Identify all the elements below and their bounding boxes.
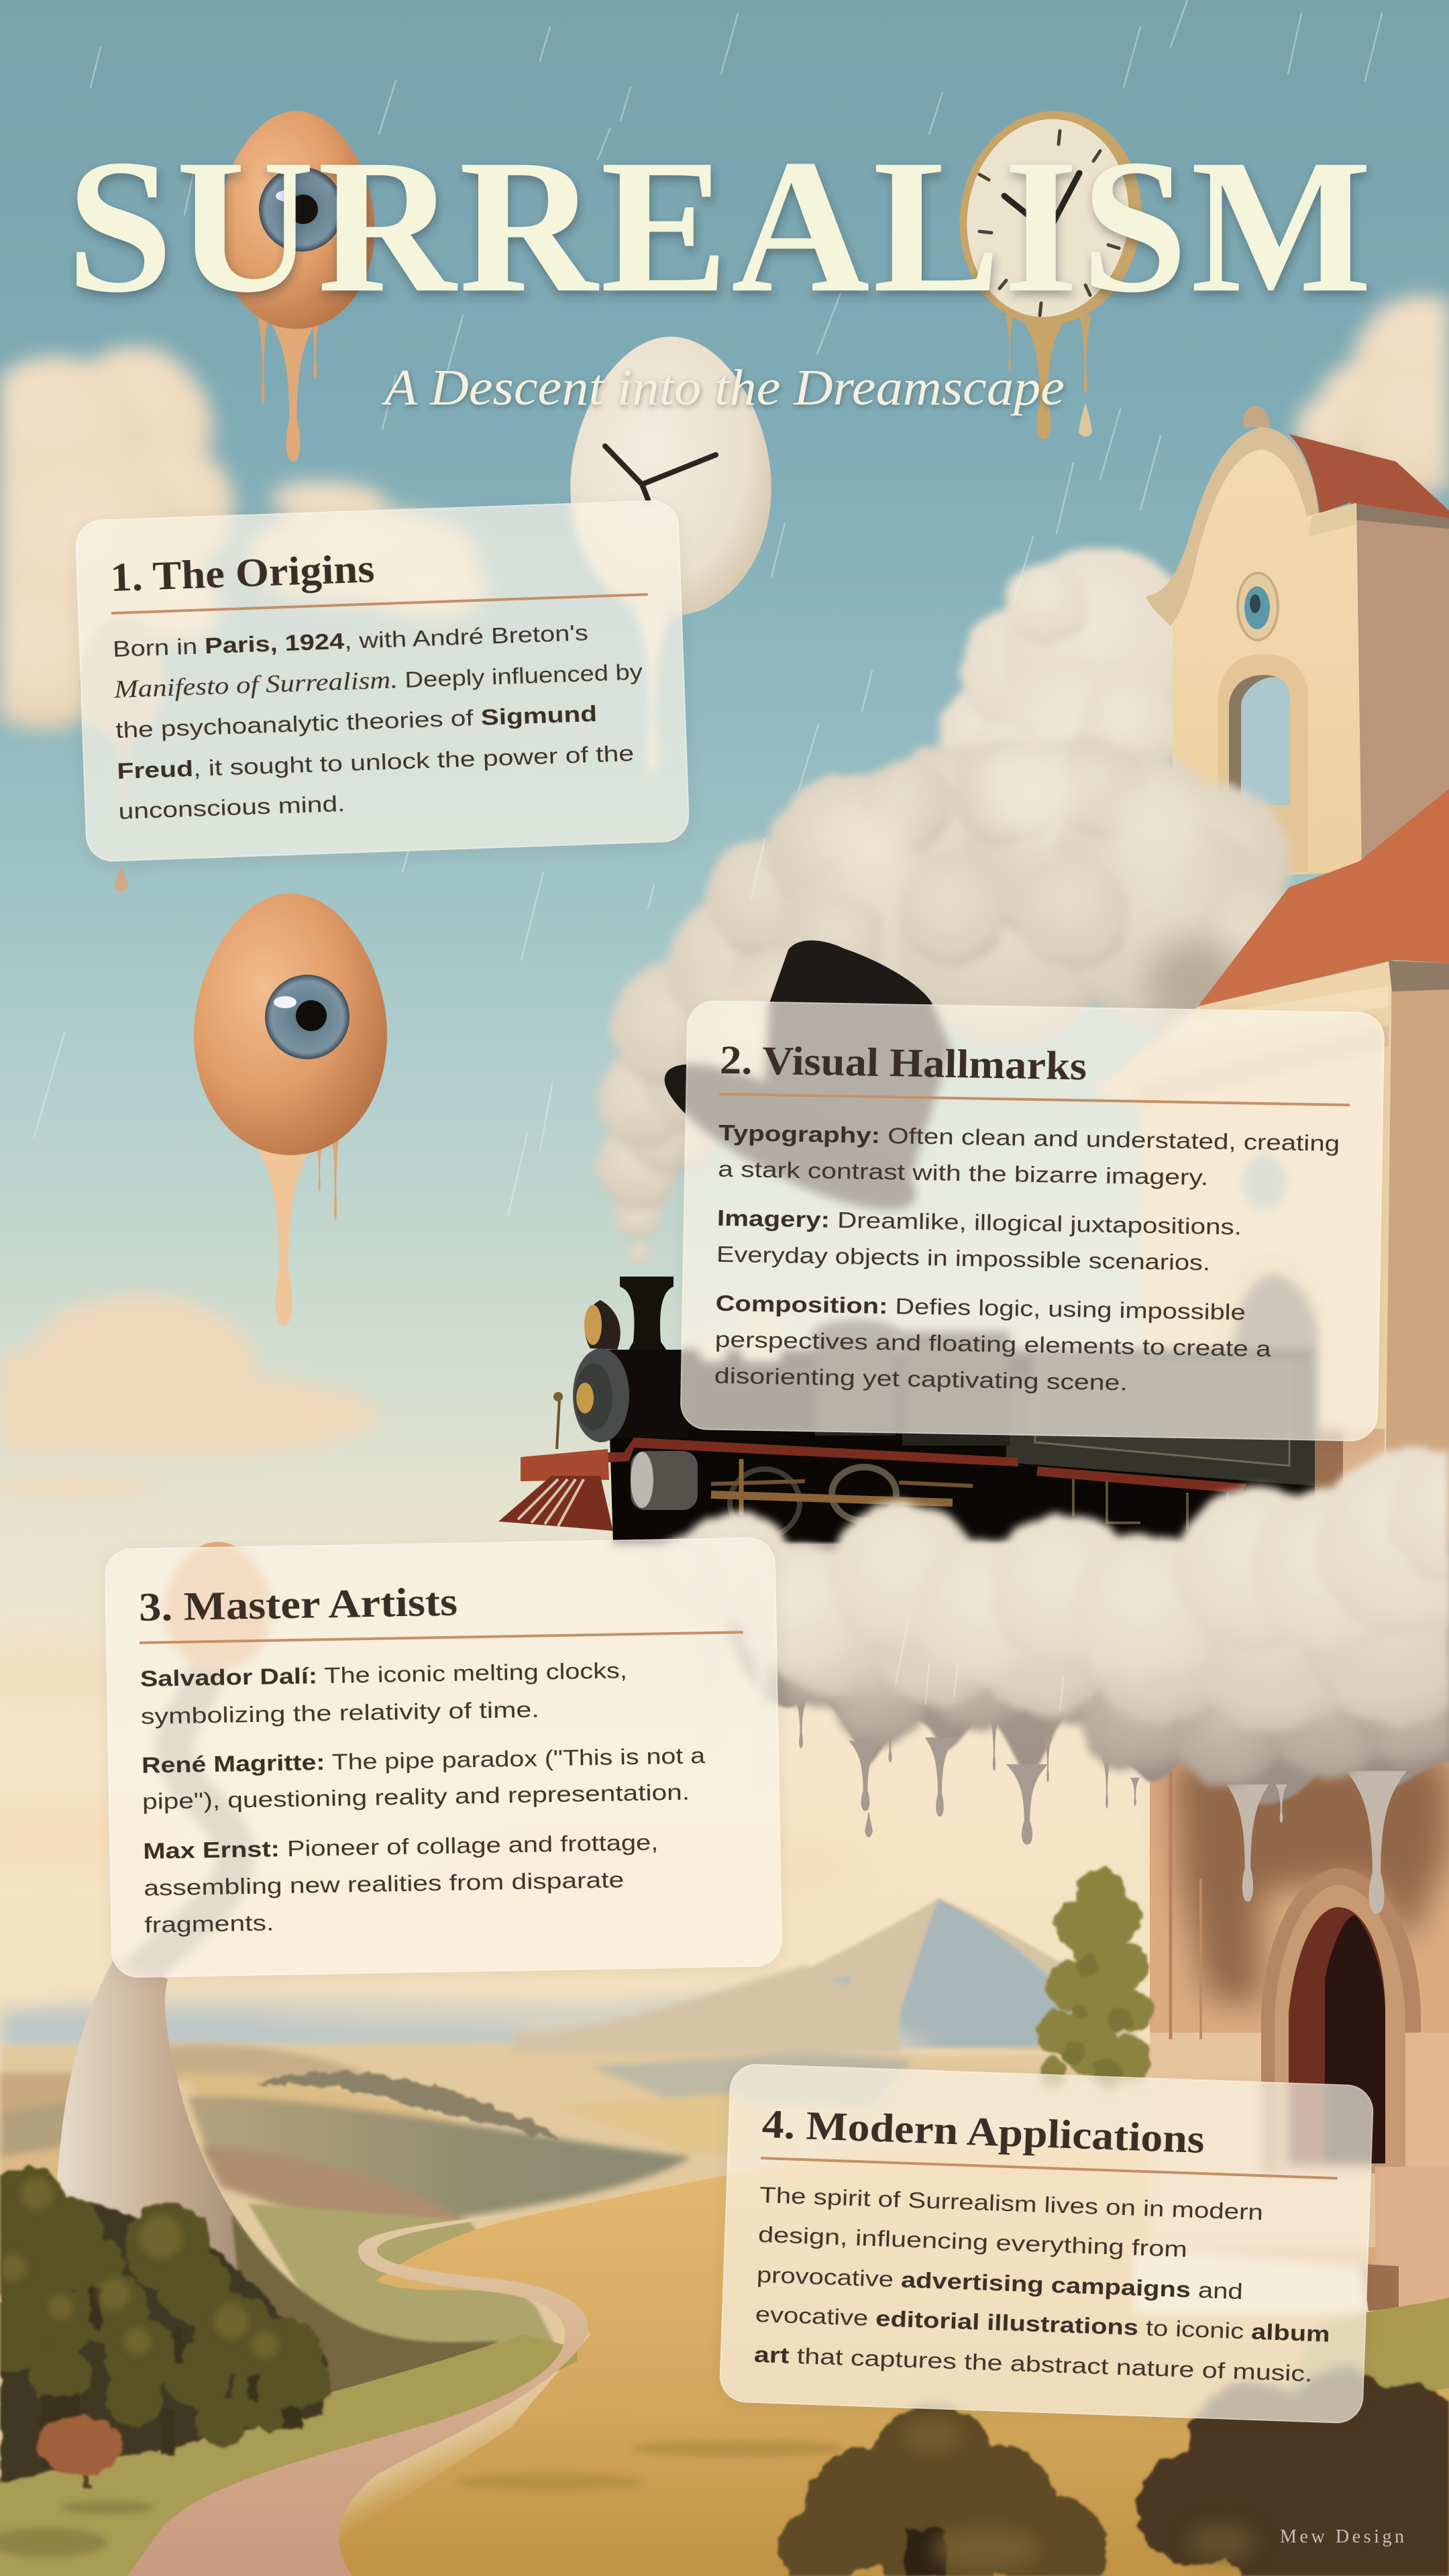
- imagery text: Imagery: Dreamlike, illogical juxtapositions.: [717, 1205, 1242, 1239]
- central cloud back lobe: [939, 547, 1221, 818]
- magritte text: [142, 1743, 706, 1814]
- panel: master artists: [104, 1537, 783, 1978]
- ernst text: fragments.: [144, 1910, 274, 1937]
- main title: SURREALISM: [66, 119, 1372, 332]
- cloud drips: [794, 1697, 1140, 1845]
- lower cloud dark puffs: [778, 1617, 1449, 1788]
- dali text: symbolizing the relativity of time.: [141, 1697, 539, 1729]
- upper right cloud: [1295, 295, 1449, 496]
- heading: the origins: 1. The Origins: [109, 546, 375, 600]
- applications body text: evocative editorial illustrations to iconic album: [755, 2302, 1330, 2347]
- typography text: Typography: Often clean and understated, creating: [718, 1120, 1340, 1156]
- grass at building foot: [1275, 2298, 1449, 2415]
- dali text: Salvador Dalí: The iconic melting clocks,: [140, 1658, 627, 1691]
- rain streaks: [34, 0, 1382, 1711]
- main eyeball egg: [194, 894, 387, 1326]
- heading: visual hallmarks: 2. Visual Hallmarks: [720, 1038, 1087, 1088]
- composition text: perspectives and floating elements to create a: [715, 1327, 1272, 1361]
- tower finial: [1243, 406, 1270, 427]
- heading: modern applications: 4. Modern Applications: [761, 2102, 1205, 2161]
- ernst text: assembling new realities from disparate: [144, 1867, 625, 1900]
- tower arch opening: [1218, 654, 1308, 872]
- origins body text: the psychoanalytic theories of Sigmund: [115, 701, 598, 743]
- round window: [1238, 573, 1278, 640]
- mid left cloud: [0, 1295, 382, 1497]
- magritte text: René Magritte: The pipe paradox ("This is not a: [142, 1743, 706, 1778]
- magritte text: pipe"), questioning reality and representation.: [142, 1780, 690, 1814]
- applications body text: [753, 2182, 1334, 2387]
- central cloud highlights: [701, 745, 1241, 1063]
- white egg with clock hands: [570, 337, 771, 773]
- small autumn tree: [36, 2416, 122, 2489]
- egg with eye behind title: [218, 111, 375, 462]
- divider rule: [140, 1631, 743, 1644]
- composition text: disorienting yet captivating scene.: [714, 1363, 1128, 1395]
- ernst text: Max Ernst: Pioneer of collage and frottage,: [143, 1829, 659, 1864]
- winding road: [127, 2211, 588, 2576]
- panel: visual hallmarks: [680, 1000, 1385, 1442]
- applications body text: provocative advertising campaigns and: [756, 2262, 1243, 2304]
- imagery text: Everyday objects in impossible scenarios.: [716, 1242, 1210, 1275]
- typography text: a stark contrast with the bizarre imagery.: [718, 1157, 1208, 1190]
- applications body text: The spirit of Surrealism lives on in modern: [759, 2182, 1263, 2224]
- faint egg behind origins panel: [80, 616, 164, 892]
- origins body text: unconscious mind.: [118, 791, 345, 824]
- distant hills: [0, 1986, 939, 2053]
- origins body text: [111, 618, 647, 824]
- tree glow: [902, 2419, 1254, 2571]
- upper tower side wall and roof: [1289, 434, 1449, 865]
- egg behind artists panel: [164, 1542, 272, 1670]
- divider rule: [761, 2157, 1338, 2180]
- distant sunset haze: [0, 1657, 872, 1885]
- cypress tree: [1037, 1868, 1154, 2088]
- central cloud mass: [596, 738, 1301, 1267]
- valley meadow: [248, 2204, 557, 2375]
- upper left cloud: [0, 349, 490, 731]
- imagery text: [716, 1205, 1242, 1275]
- bottom right trees: [778, 2368, 1449, 2576]
- panel: the origins: [74, 499, 690, 863]
- orange roof: [1198, 789, 1449, 1006]
- rolling hills: [0, 1966, 912, 2227]
- subtitle: A Descent into the Dreamscape: [381, 360, 1065, 416]
- grass lower left: [0, 2334, 577, 2576]
- upper tower front: [1146, 427, 1362, 879]
- watermark: Mew Design: [1280, 2526, 1404, 2547]
- melting tree trunk: [56, 1664, 359, 2361]
- lower cloud mid puffs: [765, 1536, 1449, 1731]
- mountain: [631, 1898, 1154, 2053]
- land base: [0, 2043, 1449, 2576]
- panel: modern applications: [718, 2063, 1375, 2424]
- divider rule: [111, 593, 648, 614]
- left tree cluster: [0, 2167, 332, 2482]
- typography text: [718, 1120, 1340, 1192]
- origins body text: Freud , it sought to unlock the power of the: [117, 741, 635, 784]
- top hat: [647, 941, 951, 1236]
- composition text: Composition: Defies logic, using impossible: [715, 1291, 1246, 1325]
- tree highlights: [0, 2178, 278, 2358]
- locomotive and carriages: [498, 1277, 1315, 1544]
- dali text: [140, 1658, 628, 1729]
- applications body text: design, influencing everything from: [758, 2222, 1187, 2261]
- golden field: [295, 2361, 1449, 2576]
- ernst text: [143, 1829, 659, 1937]
- heading: master artists: 3. Master Artists: [138, 1580, 458, 1629]
- lower stone building: [1134, 1664, 1449, 2314]
- origins body text: Born in Paris, 1924 , with André Breton's: [112, 620, 588, 661]
- melting clock: [946, 99, 1155, 439]
- lower cloud top puffs: [651, 1449, 1449, 1686]
- composition text: [714, 1291, 1273, 1397]
- stone block below roof: [1093, 961, 1449, 1563]
- grass patches: [0, 2440, 845, 2557]
- tree ridge: [258, 2072, 560, 2141]
- divider rule: [719, 1093, 1350, 1106]
- applications body text: art that captures the abstract nature of music.: [753, 2342, 1313, 2386]
- golden hill: [282, 2147, 1449, 2576]
- origins body text: Manifesto of Surrealism. Deeply influenced by: [113, 657, 643, 704]
- slope shadow: [231, 2214, 500, 2428]
- lower melting cloud: [651, 1449, 1449, 1914]
